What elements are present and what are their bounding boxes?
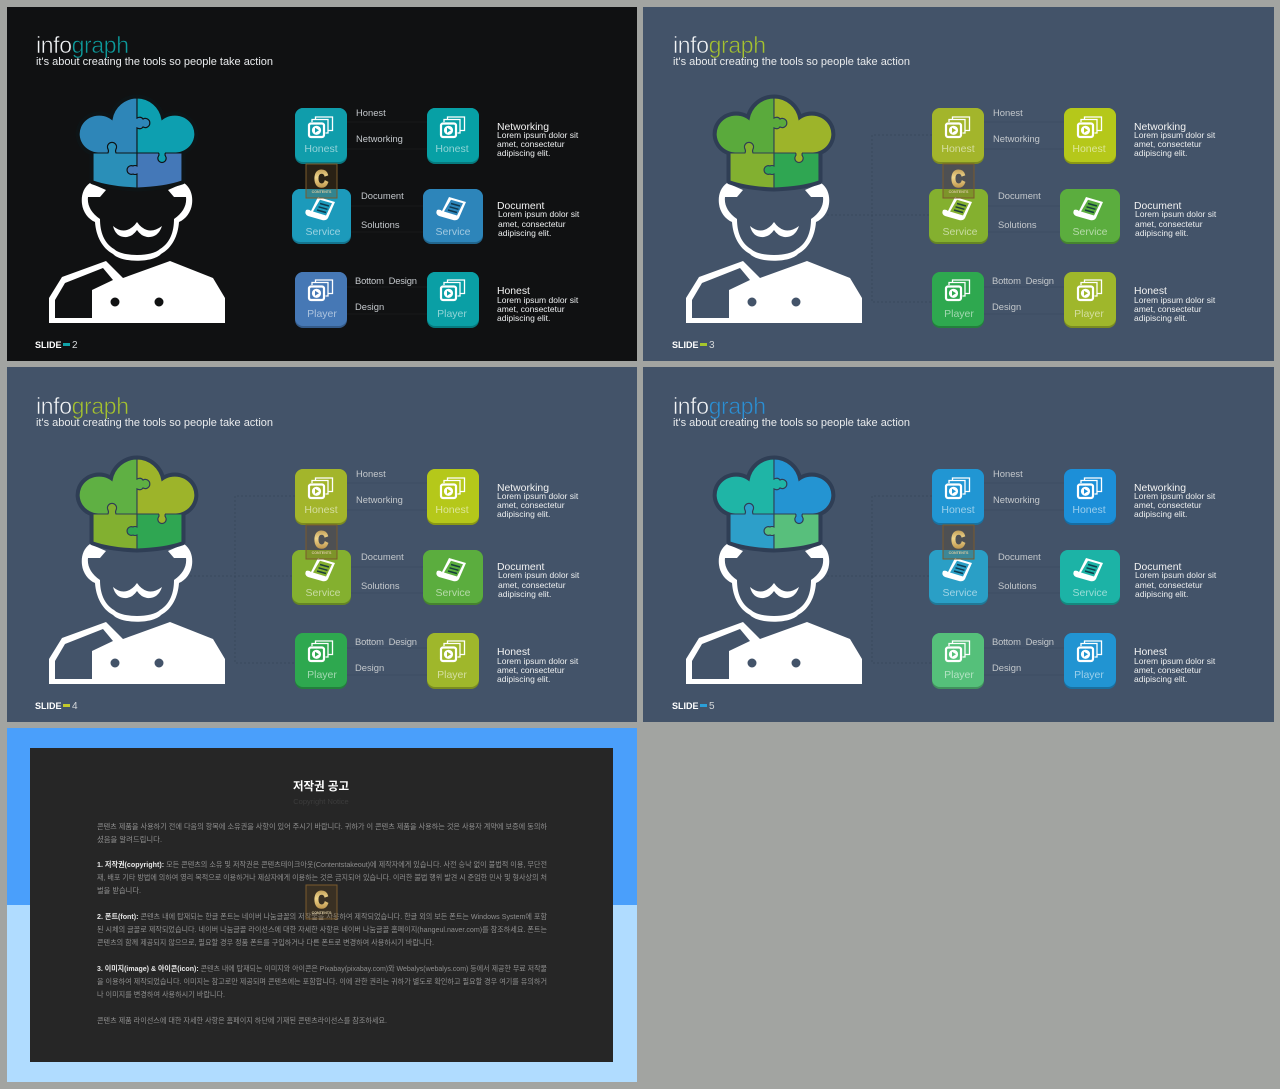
chef illustration — [49, 459, 225, 684]
slide 1: black infograph — [7, 7, 637, 361]
text block: document: Lorem ipsum dolor sit — [1135, 209, 1217, 219]
card: honest 1: Honest — [941, 504, 975, 516]
card: service 2 — [423, 189, 483, 244]
paragraph: image and icon: 을 이용하여 제작되었습니다. 이미지는 참고로만 제공되며 콘텐츠에는 포함합니다. 이에 관한 권리는 귀하가 별도로 확인하고 필요할 경우 여기를 유의하거 — [97, 977, 547, 986]
card: honest 1 — [932, 469, 984, 525]
card: service 2: Service — [435, 587, 471, 599]
text block: networking: Networking — [1134, 483, 1186, 494]
subtitle: it's about creating the tools so people take action — [673, 417, 910, 429]
slide 5: copyright notice — [7, 728, 637, 1082]
text block: document: amet, consectetur — [1135, 580, 1203, 590]
center labels: Solutions — [998, 219, 1037, 230]
text block: networking: adipiscing elit. — [497, 148, 550, 158]
center labels: Networking — [356, 494, 403, 505]
slide number: 5 — [709, 701, 715, 712]
text block: honest: Honest — [497, 286, 530, 297]
intro paragraph: 콘텐츠 제품을 사용하기 전에 다음의 항목에 소유권을 사항이 있어 주시기 바랍니다. 귀하가 이 콘텐츠 제품을 사용하는 것은 사용자 계약에 보증에 동의하 — [97, 822, 547, 831]
card: player 2 — [1064, 633, 1116, 689]
text block: honest: Honest — [497, 647, 530, 658]
card: service 2 — [423, 550, 483, 605]
center labels: Solutions — [998, 580, 1037, 591]
connector rules — [347, 483, 427, 675]
center labels — [355, 107, 417, 312]
card: player 2 — [427, 272, 479, 328]
center labels: Design — [355, 301, 384, 312]
text block: document: Document — [497, 201, 544, 212]
center labels: Solutions — [361, 219, 400, 230]
text block: honest: Honest — [1134, 286, 1167, 297]
watermark — [306, 885, 337, 919]
center labels: Bottom Design — [992, 636, 1054, 647]
title: infograph — [673, 32, 766, 58]
text block: honest: adipiscing elit. — [497, 313, 550, 323]
slide number — [35, 701, 78, 712]
text block: networking: amet, consectetur — [1134, 139, 1202, 149]
center labels: Document — [361, 551, 404, 562]
slide number: SLIDE — [35, 340, 62, 350]
slide number: 3 — [709, 340, 715, 351]
card: honest 2: Honest — [1072, 504, 1106, 516]
card: service 2 — [1060, 189, 1120, 244]
text block: document: amet, consectetur — [1135, 219, 1203, 229]
card: honest 2 — [1064, 469, 1116, 525]
card: service 1: Service — [305, 587, 341, 599]
subtitle: it's about creating the tools so people take action — [673, 56, 910, 68]
card: service 2 — [1060, 550, 1120, 605]
card: service 1: Service — [942, 226, 978, 238]
text block: networking — [1134, 122, 1216, 158]
card: honest 2 — [427, 469, 479, 525]
center labels: Bottom Design — [355, 636, 417, 647]
text block: networking: Networking — [497, 483, 549, 494]
watermark: C — [314, 886, 328, 914]
center labels: Bottom Design — [992, 275, 1054, 286]
text block: networking: adipiscing elit. — [1134, 509, 1187, 519]
card: honest 2: Honest — [435, 504, 469, 516]
slide number: SLIDE — [672, 340, 699, 350]
card: honest 2 — [427, 108, 479, 164]
card: player 1: Player — [944, 308, 974, 320]
text block: networking: amet, consectetur — [1134, 500, 1202, 510]
watermark: CONTENTS — [949, 551, 969, 555]
text block: document: Lorem ipsum dolor sit — [1135, 570, 1217, 580]
center labels: Document — [998, 551, 1041, 562]
slide number — [672, 701, 715, 712]
center labels: Document — [998, 190, 1041, 201]
card: service 1 — [929, 189, 988, 244]
text block: networking: adipiscing elit. — [497, 509, 550, 519]
text block: networking: Lorem ipsum dolor sit — [497, 130, 579, 140]
text block: honest: Lorem ipsum dolor sit — [497, 295, 579, 305]
watermark: CONTENTS — [312, 551, 332, 555]
watermark: CONTENTS — [312, 190, 332, 194]
text block: document: Document — [1134, 562, 1181, 573]
card: service 2: Service — [435, 226, 471, 238]
card: player 2 — [427, 633, 479, 689]
center labels: Networking — [993, 133, 1040, 144]
slide number — [672, 340, 715, 351]
dashed connectors — [190, 496, 295, 663]
text block: document: Lorem ipsum dolor sit — [498, 209, 580, 219]
text block: honest: amet, consectetur — [497, 665, 565, 675]
card: honest 1 — [932, 108, 984, 164]
center labels — [992, 468, 1054, 673]
text block: document — [497, 201, 580, 238]
text block: networking — [1134, 483, 1216, 519]
card: player 2: Player — [1074, 308, 1104, 320]
intro paragraph — [97, 822, 547, 844]
text block: document: adipiscing elit. — [1135, 589, 1188, 599]
chef illustration — [49, 98, 225, 323]
slide number: SLIDE — [35, 701, 62, 711]
paragraph: font — [97, 912, 547, 947]
center labels: Networking — [356, 133, 403, 144]
watermark: C — [951, 526, 965, 554]
connector rules — [984, 483, 1064, 675]
card: honest 1: Honest — [941, 143, 975, 155]
card: service 1 — [292, 550, 351, 605]
watermark — [943, 164, 974, 198]
text block: document: adipiscing elit. — [1135, 228, 1188, 238]
text block: honest: Lorem ipsum dolor sit — [1134, 656, 1216, 666]
text block: honest: Honest — [1134, 647, 1167, 658]
card: player 2: Player — [437, 308, 467, 320]
paragraph: copyright — [97, 860, 547, 895]
dashed connectors — [827, 496, 932, 663]
text block: honest: adipiscing elit. — [497, 674, 550, 684]
closing line: 콘텐츠 제품 라이선스에 대한 자세한 사항은 홈페이지 하단에 기재된 콘텐츠라이선스를 참조하세요. — [97, 1016, 387, 1025]
card: honest 1 — [295, 469, 347, 525]
dashed connectors — [827, 135, 932, 302]
text block: honest: Lorem ipsum dolor sit — [497, 656, 579, 666]
card: honest 1: Honest — [304, 504, 338, 516]
text block: honest: amet, consectetur — [1134, 304, 1202, 314]
card: service 2: Service — [1072, 587, 1108, 599]
text block: document: adipiscing elit. — [498, 589, 551, 599]
card: honest 1: Honest — [304, 143, 338, 155]
chef illustration — [686, 98, 862, 323]
text block: honest — [1134, 647, 1216, 684]
center labels: Design — [992, 662, 1021, 673]
text block: honest — [1134, 286, 1216, 323]
card: player 1 — [932, 272, 984, 328]
paragraph: image and icon — [97, 964, 547, 999]
paragraph: copyright: 벌을 받습니다. — [97, 886, 141, 895]
text block: document: amet, consectetur — [498, 219, 566, 229]
card: player 2: Player — [437, 669, 467, 681]
watermark: CONTENTS — [312, 911, 332, 915]
center labels: Honest — [993, 107, 1023, 118]
text block: networking — [497, 483, 579, 519]
text block: honest: adipiscing elit. — [1134, 674, 1187, 684]
paragraph: image and icon: 나 이미지를 변경하여 사용하시기 바랍니다. — [97, 990, 225, 999]
watermark — [306, 164, 337, 198]
center labels: Design — [355, 662, 384, 673]
slide 2: navy green infograph — [643, 7, 1274, 361]
card: player 1 — [295, 633, 347, 689]
title: infograph — [36, 393, 129, 419]
notice panel — [30, 748, 613, 1062]
text block: document: amet, consectetur — [498, 580, 566, 590]
center labels: Networking — [993, 494, 1040, 505]
watermark: C — [951, 165, 965, 193]
paragraph: font: 2. 폰트(font): 콘텐츠 내에 탑재되는 한글 폰트는 네이버 나눔글꼴의 저작물을 사용하여 제작되었습니다. 한글 외의 보든 폰트는 Windows System에 포함 — [97, 912, 547, 921]
slide 4: navy blue infograph — [643, 367, 1274, 722]
title: infograph — [673, 393, 766, 419]
subtitle: it's about creating the tools so people take action — [36, 417, 273, 429]
text block: networking — [497, 122, 579, 158]
watermark — [306, 525, 337, 559]
notice subtitle: Copyright Notice — [293, 797, 349, 806]
center labels: Honest — [356, 107, 386, 118]
text block: honest: adipiscing elit. — [1134, 313, 1187, 323]
slide number: SLIDE — [672, 701, 699, 711]
text block: networking: amet, consectetur — [497, 139, 565, 149]
title: infograph — [36, 32, 129, 58]
card: service 1: Service — [942, 587, 978, 599]
subtitle: it's about creating the tools so people take action — [36, 56, 273, 68]
paragraph: font: 콘텐츠의 함께 제공되지 않으므로, 필요할 경우 정품 폰트를 구입하거나 다른 폰트로 변경하여 사용하시기 바랍니다. — [97, 938, 434, 947]
notice title: 저작권 공고 — [293, 779, 349, 793]
connector rules — [984, 122, 1064, 314]
text block: honest: amet, consectetur — [497, 304, 565, 314]
text block: document: adipiscing elit. — [498, 228, 551, 238]
center labels: Honest — [993, 468, 1023, 479]
text block: document: Lorem ipsum dolor sit — [498, 570, 580, 580]
watermark: CONTENTS — [949, 190, 969, 194]
slide number — [35, 340, 78, 351]
text block: document: Document — [1134, 201, 1181, 212]
watermark — [943, 525, 974, 559]
card: honest 2: Honest — [435, 143, 469, 155]
text block: honest: Lorem ipsum dolor sit — [1134, 295, 1216, 305]
paragraph: image and icon: 3. 이미지(image) & 아이콘(icon): 콘텐츠 내에 탑재되는 이미지와 아이콘은 Pixabay(pixabay.com)와 Webalys(webalys.com) 등에서 제공한 무료 저작물 — [97, 964, 547, 973]
card: player 1 — [295, 272, 347, 328]
text block: honest — [497, 286, 579, 323]
center labels: Solutions — [361, 580, 400, 591]
text block: networking: adipiscing elit. — [1134, 148, 1187, 158]
connector rules — [347, 122, 427, 314]
card: honest 2 — [1064, 108, 1116, 164]
text block: networking: Lorem ipsum dolor sit — [1134, 491, 1216, 501]
paragraph: copyright: 1. 저작권(copyright): 모든 콘텐츠의 소유 및 저작권은 콘텐츠테이크아웃(Contentstakeout)에 제작자에게 있습니다. 사전 승낙 없이 불법적 이용, 무단전 — [97, 860, 547, 869]
center labels — [992, 107, 1054, 312]
card: service 1 — [292, 189, 351, 244]
card: honest 1 — [295, 108, 347, 164]
text block: honest: amet, consectetur — [1134, 665, 1202, 675]
text block: networking: Lorem ipsum dolor sit — [497, 491, 579, 501]
card: player 1: Player — [307, 308, 337, 320]
card: player 2: Player — [1074, 669, 1104, 681]
card: player 1 — [932, 633, 984, 689]
card: player 2 — [1064, 272, 1116, 328]
slide number: 4 — [72, 701, 78, 712]
center labels: Design — [992, 301, 1021, 312]
center labels: Honest — [356, 468, 386, 479]
card: service 2: Service — [1072, 226, 1108, 238]
card: honest 2: Honest — [1072, 143, 1106, 155]
card: player 1: Player — [944, 669, 974, 681]
watermark: C — [314, 165, 328, 193]
text block: networking: Lorem ipsum dolor sit — [1134, 130, 1216, 140]
slide 3: navy lime infograph — [7, 367, 637, 722]
center labels: Document — [361, 190, 404, 201]
text block: document: Document — [497, 562, 544, 573]
card: player 1: Player — [307, 669, 337, 681]
paragraph: font: 된 시체의 글꼴로 제작되었습니다. 네이버 나눔글꼴 라이선스에 대한 자세한 사항은 네이버 나눔글꼴 홈페이지(hangeul.naver.com)를 참조하세요. 폰트는 — [97, 925, 547, 934]
text block: document — [1134, 562, 1217, 599]
text block: honest — [497, 647, 579, 684]
text block: networking: amet, consectetur — [497, 500, 565, 510]
paragraph: copyright: 재, 배포 기타 방법에 의하여 영리 목적으로 이용하거나 제삼자에게 이용하는 것은 금지되어 있습니다. 이러한 불법 행위 발견 시 준엄한 민사 및 형사상의 처 — [97, 873, 547, 882]
intro paragraph: 셨음을 알려드립니다. — [97, 835, 162, 844]
text block: document — [497, 562, 580, 599]
chef illustration — [686, 459, 862, 684]
text block: networking: Networking — [1134, 122, 1186, 133]
card: service 1: Service — [305, 226, 341, 238]
text block: document — [1134, 201, 1217, 238]
slide number: 2 — [72, 340, 78, 351]
center labels: Bottom Design — [355, 275, 417, 286]
card: service 1 — [929, 550, 988, 605]
watermark: C — [314, 526, 328, 554]
text block: networking: Networking — [497, 122, 549, 133]
center labels — [355, 468, 417, 673]
